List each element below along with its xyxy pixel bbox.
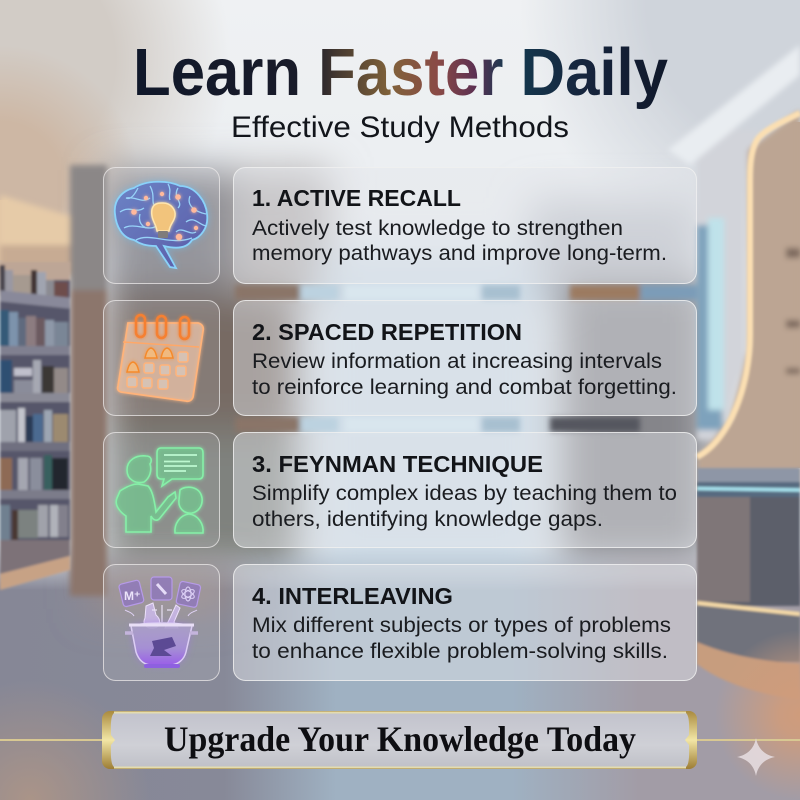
- icon: brain with light bulb: [115, 182, 207, 268]
- panel: interleaving icon: [104, 564, 220, 680]
- body text: Mix different subjects or types of problems: [252, 614, 671, 637]
- body text: to enhance flexible problem-solving skills.: [252, 640, 668, 663]
- heading: 1. ACTIVE RECALL: [252, 185, 461, 211]
- body text: memory pathways and improve long-term.: [252, 242, 667, 265]
- left wall and column: [0, 200, 8, 260]
- panel: feynman icon: [104, 432, 220, 548]
- banner: call to action: [0, 711, 800, 769]
- bookshelves: [0, 262, 70, 590]
- panel: interleaving text: [234, 564, 696, 680]
- body text: others, identifying knowledge gaps.: [252, 508, 603, 531]
- panel: spaced repetition icon: [104, 300, 220, 416]
- floor: [0, 540, 800, 800]
- centre window strips: [235, 285, 700, 432]
- walls behind the cards: [105, 170, 710, 570]
- title: Learn Faster Daily: [133, 35, 668, 110]
- icon: sparkle: [737, 738, 775, 776]
- subtitle: Effective Study Methods: [231, 111, 569, 144]
- right wall, window and desk: [792, 122, 800, 468]
- heading: 2. SPACED REPETITION: [252, 319, 522, 345]
- icon: teacher and student: [116, 448, 203, 533]
- heading: 4. INTERLEAVING: [252, 583, 453, 609]
- body text: to reinforce learning and combat forgetting.: [252, 376, 677, 399]
- icon: calendar with alarms: [118, 315, 203, 401]
- panel: feynman text: [234, 432, 696, 548]
- body text: Actively test knowledge to strengthen: [252, 217, 623, 240]
- body text: Review information at increasing intervals: [252, 350, 662, 373]
- panel: spaced repetition text: [234, 300, 696, 416]
- banner text: Upgrade Your Knowledge Today: [164, 719, 636, 759]
- icon: mixing pot: M⁺: [124, 589, 140, 603]
- panel: active recall text: [234, 168, 696, 284]
- body text: Simplify complex ideas by teaching them to: [252, 482, 677, 505]
- panel: active recall icon: [104, 168, 220, 284]
- heading: 3. FEYNMAN TECHNIQUE: [252, 451, 543, 477]
